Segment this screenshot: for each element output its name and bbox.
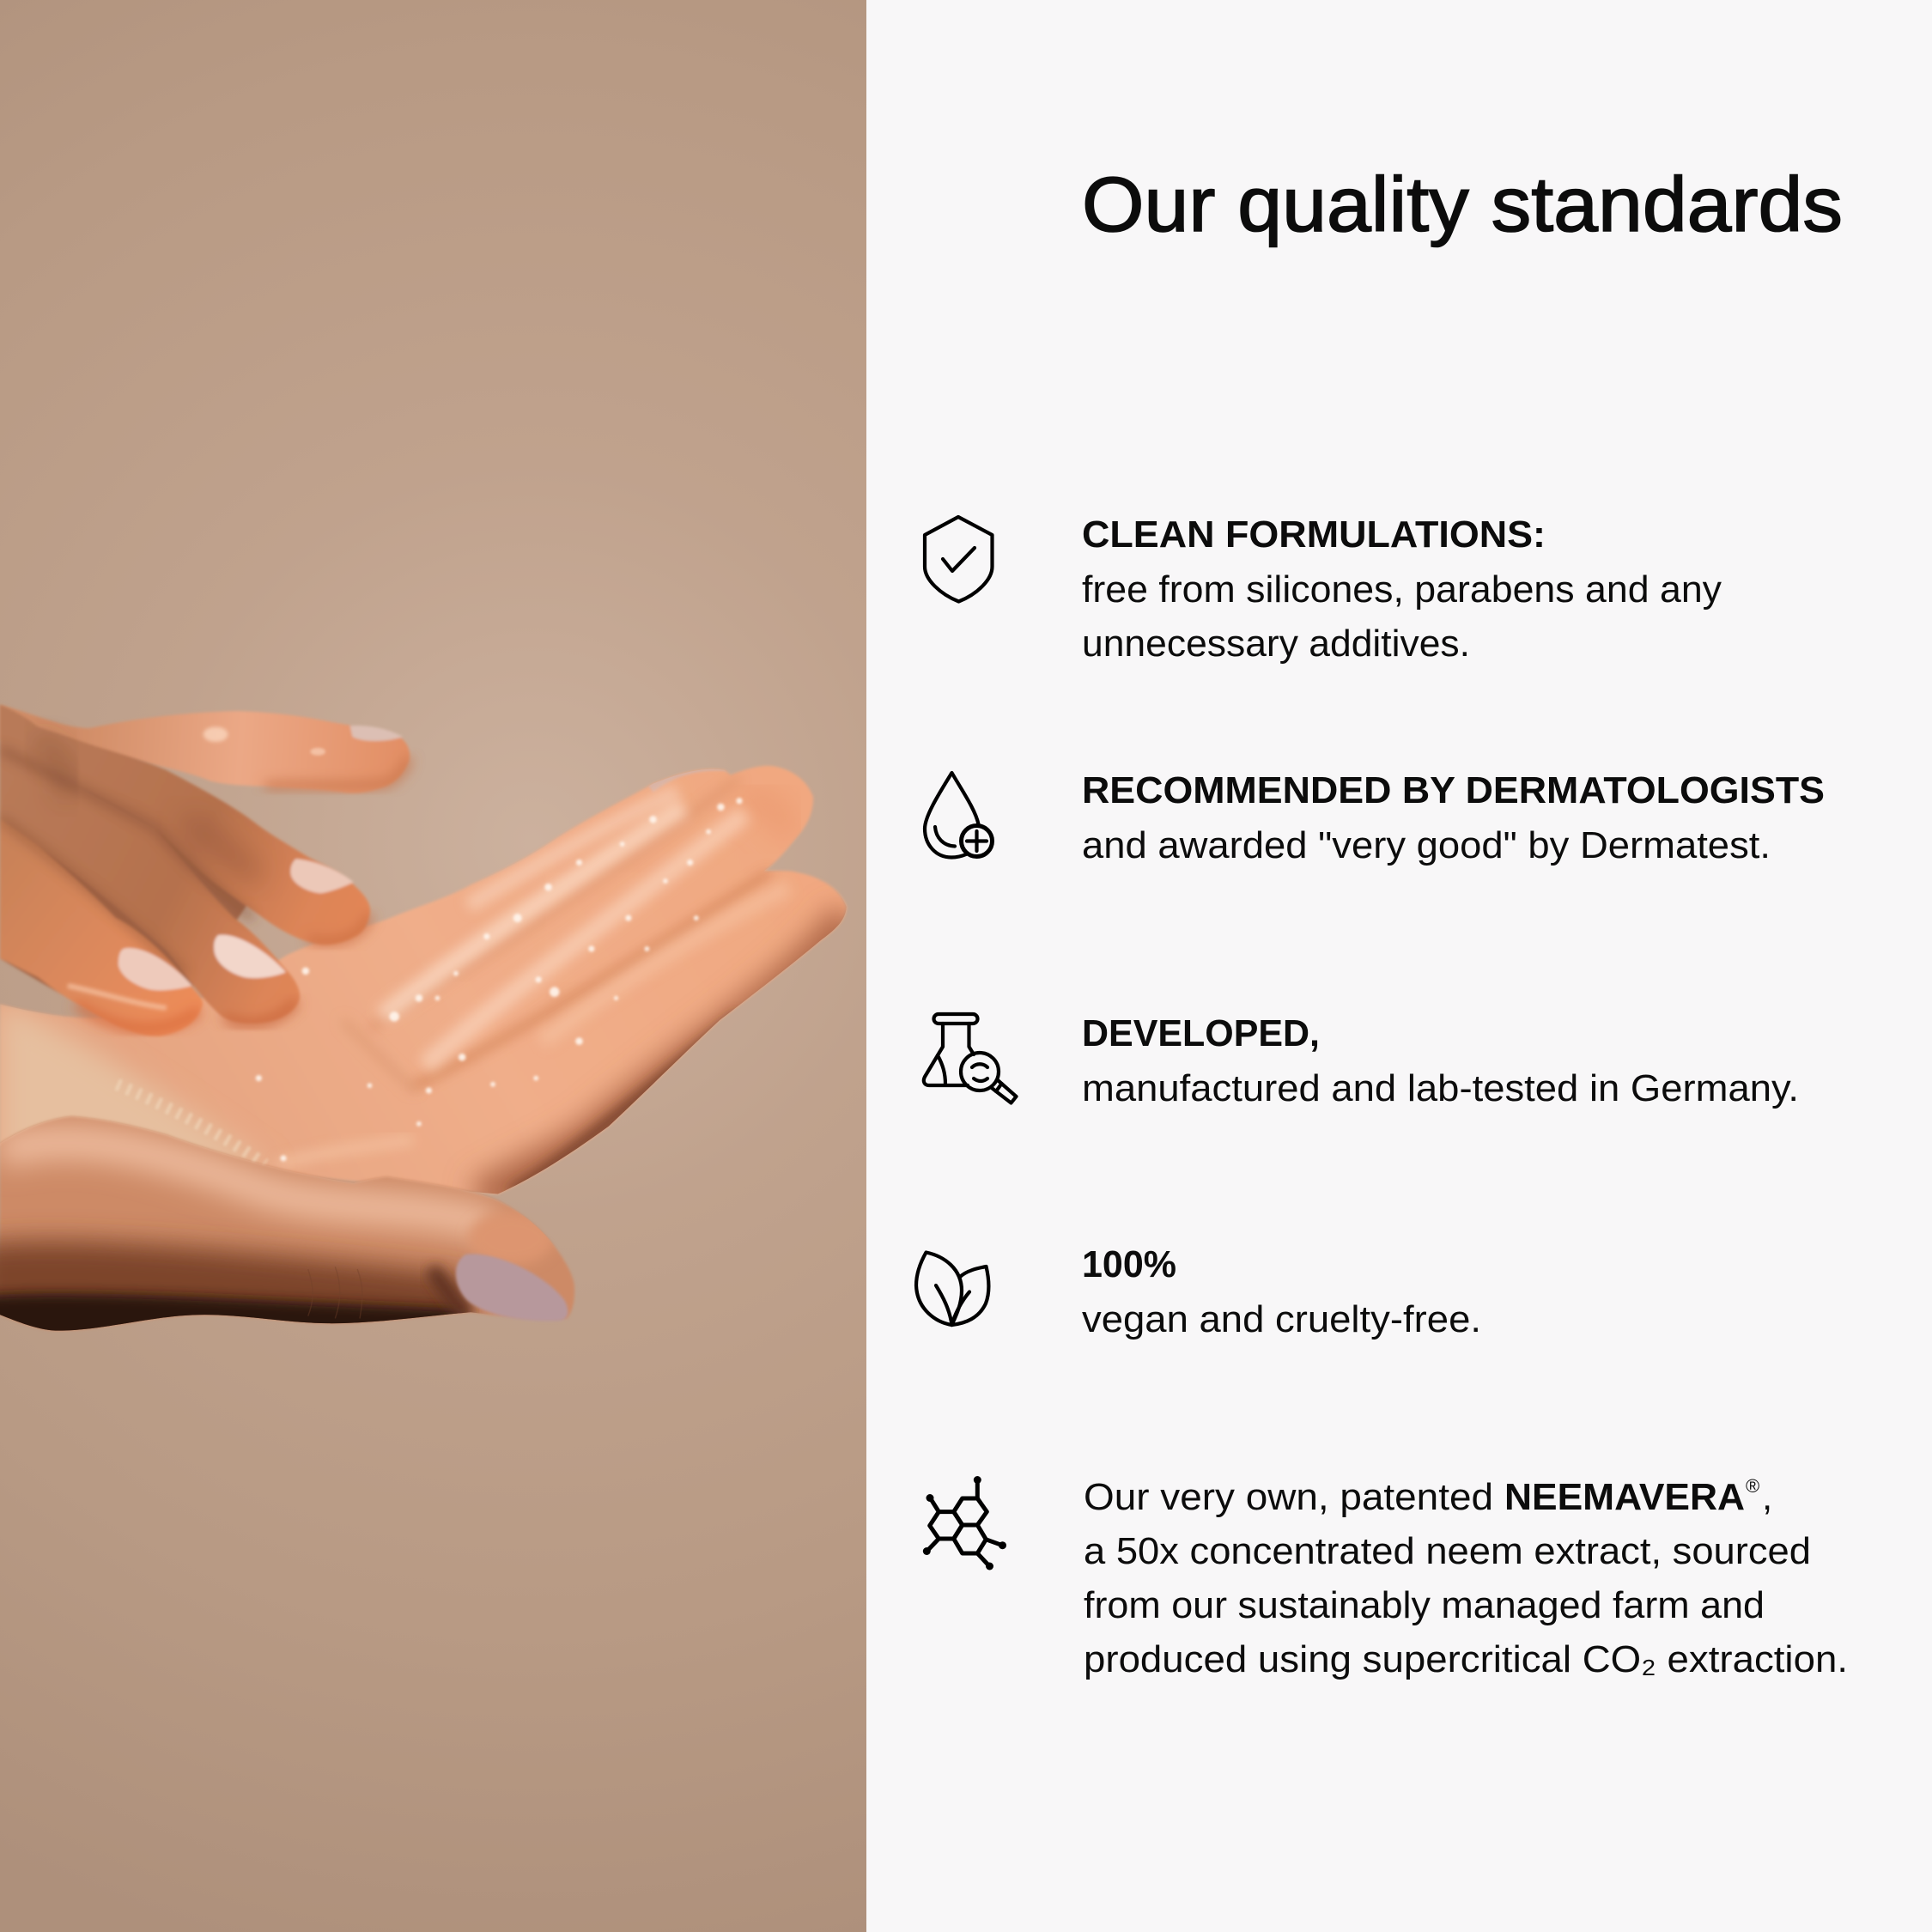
text: neemavera description: Our very own, patented [1084, 1476, 1493, 1518]
icon: shield with check [925, 517, 993, 601]
lower shade [0, 1241, 468, 1343]
text: clean formulations description [1082, 568, 1722, 665]
lower hand: palm and fingers [0, 766, 850, 1201]
back finger [0, 705, 410, 793]
title: Our quality standards [1082, 162, 1843, 248]
panel: photo background [0, 0, 866, 1932]
gel sheen [468, 791, 677, 906]
gel highlights [256, 798, 743, 1161]
text: clean formulations description: free from silicones, parabens and any [1082, 568, 1722, 611]
icon: flask with magnifier [924, 1014, 1017, 1103]
finger shading [0, 749, 252, 918]
text: neemavera description [1084, 1475, 1848, 1680]
icon: drop with plus [925, 773, 993, 857]
third finger [0, 745, 300, 1024]
thumb [0, 1116, 574, 1343]
shaded base between fingers [3, 790, 247, 993]
icon: leaves [916, 1252, 988, 1325]
icon: molecule [923, 1476, 1006, 1570]
text: neemavera description: ® [1746, 1475, 1759, 1497]
text: neemavera description: from our sustainably managed farm and [1084, 1584, 1765, 1626]
text: dermatest award: and awarded "very good" by Dermatest. [1082, 824, 1771, 866]
text: clean formulations description: unnecessary additives. [1082, 623, 1470, 665]
text: neemavera description: , [1762, 1476, 1772, 1518]
text: neemavera description: produced using supercritical CO₂ extraction. [1084, 1638, 1848, 1680]
panel: text background [866, 0, 1932, 1932]
thumbnail [456, 1254, 568, 1321]
item: vegan [916, 1243, 1481, 1340]
photo: hands with gel [0, 705, 850, 1343]
pale wrist and foam [0, 1005, 254, 1160]
item: developed in germany [924, 1012, 1799, 1109]
text: manufactured in germany: manufactured and lab-tested in Germany. [1082, 1067, 1799, 1109]
item: neemavera [923, 1475, 1848, 1680]
item: clean formulations [925, 513, 1722, 665]
text: vegan and cruelty-free: vegan and cruelty-free. [1082, 1298, 1481, 1340]
pale tip of index finger [651, 766, 730, 788]
heading: developed: DEVELOPED, [1082, 1012, 1320, 1054]
shaded outer edge [481, 918, 850, 1201]
heading: recommended by dermatologists: RECOMMENDED BY DERMATOLOGISTS [1082, 769, 1825, 811]
upper hand fingers [0, 705, 370, 1036]
heading: 100%: 100% [1082, 1243, 1176, 1285]
fourth finger [0, 813, 203, 1036]
item: recommended by dermatologists [925, 769, 1825, 866]
text: neemavera description: NEEMAVERA [1504, 1476, 1745, 1518]
knuckle creases [308, 1267, 362, 1318]
second finger [0, 705, 370, 945]
tip [468, 1212, 555, 1266]
top light [0, 1142, 493, 1226]
finger creases [369, 779, 739, 1029]
heading: clean formulations: CLEAN FORMULATIONS: [1082, 513, 1546, 556]
fingernails [290, 859, 354, 893]
text: neemavera description: a 50x concentrated neem extract, sourced [1084, 1530, 1811, 1572]
